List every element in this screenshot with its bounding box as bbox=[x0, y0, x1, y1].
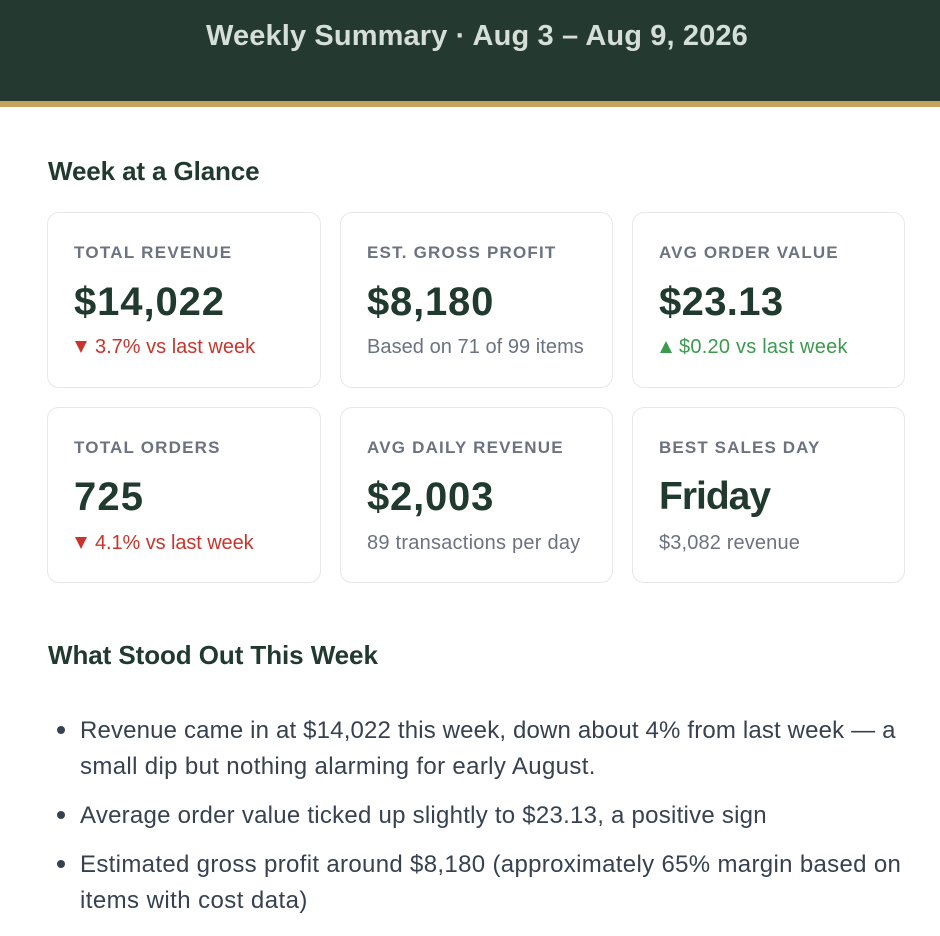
card: estimated gross profit bbox=[340, 212, 613, 388]
bullet: revenue: small dip but nothing alarming for early August. bbox=[80, 753, 596, 780]
card: average order value bbox=[632, 212, 905, 388]
card: average order value: AVG ORDER VALUE bbox=[659, 243, 839, 262]
heading: week at a glance: Week at a Glance bbox=[48, 156, 260, 186]
card: best sales day: $3,082 revenue bbox=[659, 532, 800, 554]
card: best sales day bbox=[632, 407, 905, 583]
card: total orders bbox=[47, 407, 321, 583]
bullet: revenue: Revenue came in at $14,022 this week, down about 4% from last week — a bbox=[80, 717, 896, 744]
card: total revenue: 3.7% vs last week bbox=[95, 336, 255, 358]
card: average order value: $0.20 vs last week bbox=[679, 336, 848, 358]
heading: what stood out: What Stood Out This Week bbox=[48, 640, 378, 670]
bullet: gross profit bbox=[57, 851, 901, 914]
bullet: average order value: Average order value ticked up slightly to $23.13, a positive sign bbox=[80, 802, 767, 829]
card: average daily revenue bbox=[340, 407, 613, 583]
card: average daily revenue: 89 transactions per day bbox=[367, 532, 580, 554]
title: Weekly Summary · Aug 3 – Aug 9, 2026 bbox=[206, 20, 748, 52]
card: total revenue: $14,022 bbox=[74, 280, 225, 324]
card: estimated gross profit: EST. GROSS PROFIT bbox=[367, 243, 556, 262]
card: total revenue: TOTAL REVENUE bbox=[74, 243, 232, 262]
card: estimated gross profit: $8,180 bbox=[367, 280, 494, 324]
bullet: gross profit: items with cost data) bbox=[80, 887, 308, 914]
card: total orders: TOTAL ORDERS bbox=[74, 438, 221, 457]
bullet: gross profit: Estimated gross profit around $8,180 (approximately 65% margin based on bbox=[80, 851, 901, 878]
card: total orders: 725 bbox=[74, 475, 144, 519]
header banner bbox=[0, 0, 940, 107]
card: average daily revenue: $2,003 bbox=[367, 475, 494, 519]
card: average daily revenue: AVG DAILY REVENUE bbox=[367, 438, 564, 457]
card: total orders: 4.1% vs last week bbox=[95, 532, 254, 554]
card: estimated gross profit: Based on 71 of 99 items bbox=[367, 336, 584, 358]
bullet list bbox=[57, 717, 901, 914]
card: best sales day: Friday bbox=[659, 475, 770, 518]
card: total revenue bbox=[47, 212, 321, 388]
card: best sales day: BEST SALES DAY bbox=[659, 438, 820, 457]
bullet: revenue bbox=[57, 717, 896, 780]
card: average order value: $23.13 bbox=[659, 280, 783, 324]
